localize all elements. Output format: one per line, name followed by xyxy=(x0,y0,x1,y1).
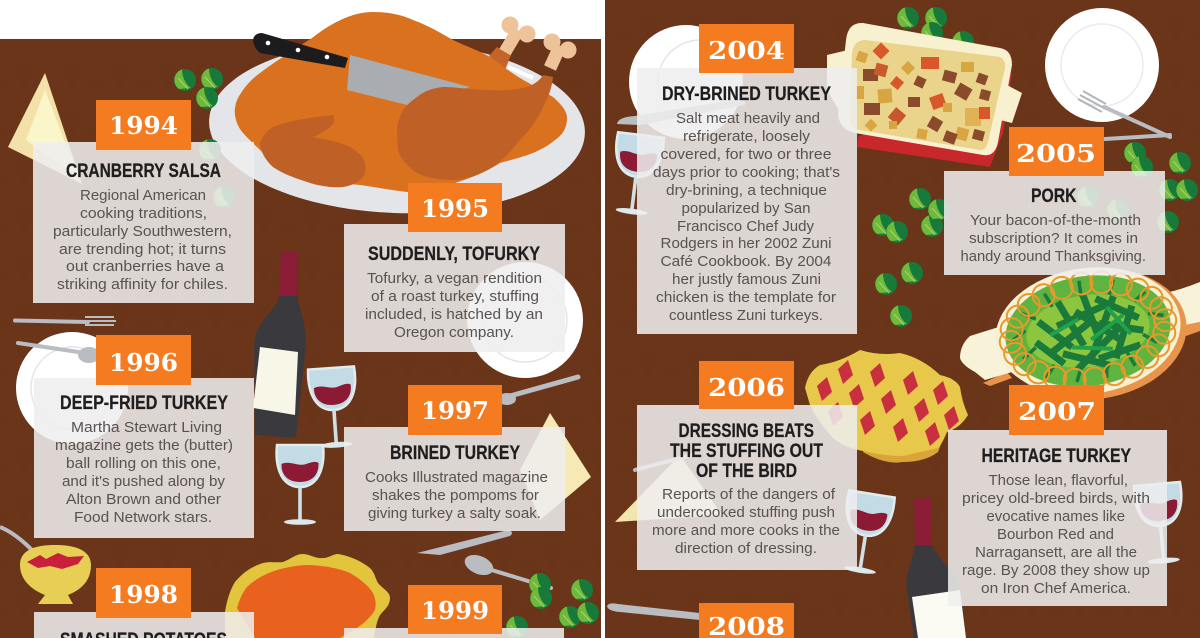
body text 2007 xyxy=(962,473,1150,597)
body text 2006: more and more cooks in the xyxy=(652,523,840,539)
illustration: wine glass lower xyxy=(277,445,323,525)
illustration: wine bottle lower right xyxy=(906,498,966,638)
body text 1996: Martha Stewart Living xyxy=(71,420,222,436)
body text 2007: evocative names like xyxy=(986,509,1125,525)
entry: 2006 dressing beats the stuffing xyxy=(637,361,857,570)
body text 2006: Reports of the dangers of xyxy=(662,487,835,503)
icon: brussels sprouts lower left panel xyxy=(506,573,599,638)
icon: brussels sprouts above casserole xyxy=(897,7,974,53)
icon: fork near 1997 xyxy=(498,377,578,405)
icon: folded napkin xyxy=(8,73,82,184)
illustration: roast turkey on platter with knife xyxy=(206,12,588,220)
year badge 2005: 2005 xyxy=(1016,139,1096,168)
year badge 1996: 1996 xyxy=(109,348,178,377)
right panel: tablecloth background xyxy=(605,0,1200,638)
year badge 1998 xyxy=(96,568,191,618)
body text 1996 xyxy=(55,420,233,526)
heading: Brined Turkey: BRINED TURKEY xyxy=(390,442,520,464)
entry: 2007 heritage turkey xyxy=(948,385,1167,606)
illustration: cherry lattice pie xyxy=(805,350,968,463)
entry: 1998 smashed potatoes xyxy=(34,568,254,638)
year badge 1997: 1997 xyxy=(421,396,489,425)
icon: dinner plate by 1995 xyxy=(467,262,583,378)
illustration: stuffing casserole dish xyxy=(827,23,1022,167)
heading: Dry-Brined Turkey: DRY-BRINED TURKEY xyxy=(662,83,831,105)
icon: knife xyxy=(417,530,512,555)
entry: 2005 pork xyxy=(944,127,1165,275)
body text 2004 xyxy=(653,111,840,324)
illustration: wine bottle xyxy=(253,251,306,438)
body text 2006 xyxy=(652,487,840,557)
year badge 2004: 2004 xyxy=(708,36,785,65)
year badge 1995: 1995 xyxy=(421,194,489,223)
body text 1994: striking affinity for chiles. xyxy=(57,277,228,293)
body text 2007: Bourbon Red and xyxy=(997,527,1114,543)
body text 2005: Your bacon-of-the-month xyxy=(970,213,1141,229)
body text 2007: on Iron Chef America. xyxy=(981,581,1131,597)
body text 1995: of a roast turkey, stuffing xyxy=(371,289,539,305)
year badge 1996 xyxy=(96,335,191,385)
year badge 2005 xyxy=(1009,127,1104,176)
body text 1995: Tofurky, a vegan rendition xyxy=(367,271,542,287)
body text 2007: pricey old-breed birds, with xyxy=(962,491,1150,507)
year badge 2007 xyxy=(1009,385,1104,435)
year badge 1999 xyxy=(408,585,502,634)
body text 2004: Rodgers in her 2002 Zuni xyxy=(660,236,832,252)
illustration: wine glass left xyxy=(608,132,664,217)
body text 2006: direction of dressing. xyxy=(675,541,817,557)
heading: Suddenly, Tofurky: SUDDENLY, TOFURKY xyxy=(368,243,540,265)
illustration: wine glass upper xyxy=(308,366,360,449)
body text 2004: Francisco Chef Judy xyxy=(677,219,815,235)
heading: Pork: PORK xyxy=(1031,185,1076,207)
year badge 2006: 2006 xyxy=(708,373,785,402)
icon: dinner plate by 2004 xyxy=(629,25,743,139)
body text 2004: dry-brining, a technique xyxy=(666,183,827,199)
heading: Dressing Beats the Stuffing Out of the Bird: OF THE BIRD xyxy=(696,460,797,482)
year badge 1995 xyxy=(408,183,502,232)
body text 1997: Cooks Illustrated magazine xyxy=(365,470,548,486)
year badge 2006 xyxy=(699,361,794,409)
year badge 1994: 1994 xyxy=(109,111,178,140)
body text 2005 xyxy=(960,213,1146,265)
body text 1994 xyxy=(53,188,232,293)
body text 2004: refrigerate, loosely xyxy=(683,129,811,145)
body text 2004: popularized by San xyxy=(682,201,811,217)
heading: Deep-Fried Turkey: DEEP-FRIED TURKEY xyxy=(60,392,228,414)
icon: spoon xyxy=(462,551,551,588)
icon: spoon on plate xyxy=(18,343,100,363)
body text 1994: out cranberries have a xyxy=(66,259,224,275)
entry: 2004 dry-brined turkey xyxy=(637,24,857,334)
year badge 1999: 1999 xyxy=(421,596,489,625)
heading: Dressing Beats the Stuffing Out of the Bird: THE STUFFING OUT xyxy=(670,440,823,462)
body text 2004: days prior to cooking; that's xyxy=(653,165,840,181)
body text 2004: covered, for two or three xyxy=(660,147,832,163)
entry: 1999 xyxy=(344,585,564,638)
icon: knife by 2004 xyxy=(617,98,745,125)
illustration: wine glass near 2006 xyxy=(836,490,895,576)
icon: brussels sprouts center right panel xyxy=(872,188,950,327)
body text 1996: Food Network stars. xyxy=(74,510,212,526)
heading: Heritage Turkey: HERITAGE TURKEY xyxy=(982,445,1131,467)
body text 1994: cooking traditions, xyxy=(80,206,207,222)
year badge 1997 xyxy=(408,385,502,435)
body text 2004: chicken is the template for xyxy=(656,290,836,306)
body text 1994: Regional American xyxy=(80,188,206,204)
body text 1996: Alton Brown and other xyxy=(66,492,221,508)
illustration: green bean casserole xyxy=(960,256,1200,411)
year badge 1998: 1998 xyxy=(109,580,178,609)
icon: dinner plate by 2005 with fork xyxy=(1045,8,1170,139)
heading: Cranberry Salsa: CRANBERRY SALSA xyxy=(66,160,221,182)
heading: Dressing Beats the Stuffing Out of the Bird: DRESSING BEATS xyxy=(678,420,814,442)
body text 1996: and it's pushed along by xyxy=(62,474,226,490)
body text 1994: particularly Southwestern, xyxy=(53,224,232,240)
icon: fork at left xyxy=(15,317,116,325)
body text 2004: Café Cookbook. By 2004 xyxy=(660,254,832,270)
icon: napkin near 1997 xyxy=(520,413,591,520)
body text 1995: Oregon company. xyxy=(394,325,514,341)
year badge 1994 xyxy=(96,100,191,150)
body text 2005: subscription? It comes in xyxy=(969,231,1138,247)
body text 2004: her justly famous Zuni xyxy=(672,272,821,288)
entry: 1995 suddenly, tofurky xyxy=(344,183,565,352)
illustration: cranberry bowl with spoon xyxy=(0,527,91,604)
body text 1996: ball rolling on this one, xyxy=(66,456,221,472)
year badge 2004 xyxy=(699,24,794,73)
entry: 1996 deep-fried turkey xyxy=(34,335,254,538)
icon: dinner plate by 1996 xyxy=(16,332,128,444)
entry: 1997 brined turkey xyxy=(344,385,565,531)
body text 2007: Those lean, flavorful, xyxy=(988,473,1128,489)
body text 1995: included, is hatched by an xyxy=(365,307,543,323)
entry: 1994 cranberry salsa xyxy=(33,100,254,303)
body text 1995 xyxy=(365,271,543,341)
entry: 2008 year badge xyxy=(699,603,794,638)
body text 1996: magazine gets the (butter) xyxy=(55,438,233,454)
body text 2007: Narragansett, are all the xyxy=(975,545,1137,561)
body text 2005: handy around Thanksgiving. xyxy=(960,249,1146,265)
left panel: tablecloth background xyxy=(0,39,601,638)
body text 1997 xyxy=(365,470,548,522)
icon: napkin and fork near 2006 xyxy=(615,455,722,522)
icon: brussels sprouts far right xyxy=(1077,142,1198,233)
illustration: pumpkin pie xyxy=(225,554,390,638)
heading: Dressing Beats the Stuffing Out of the Bird xyxy=(670,420,823,482)
icon: brussels sprouts near turkey xyxy=(174,68,235,208)
body text 1997: shakes the pompoms for xyxy=(372,488,539,504)
year badge 2007: 2007 xyxy=(1018,397,1096,426)
body text 2006: undercooked stuffing push xyxy=(657,505,835,521)
body text 1997: giving turkey a salty soak. xyxy=(368,506,541,522)
body text 2004: countless Zuni turkeys. xyxy=(669,308,823,324)
body text 2007: rage. By 2008 they show up xyxy=(962,563,1150,579)
body text 2004: Salt meat heavily and xyxy=(676,111,820,127)
body text 1994: are trending hot; it turns xyxy=(59,242,226,258)
illustration: wine glass near 2007 xyxy=(1134,482,1187,566)
icon: knife near 2008 xyxy=(607,603,700,620)
